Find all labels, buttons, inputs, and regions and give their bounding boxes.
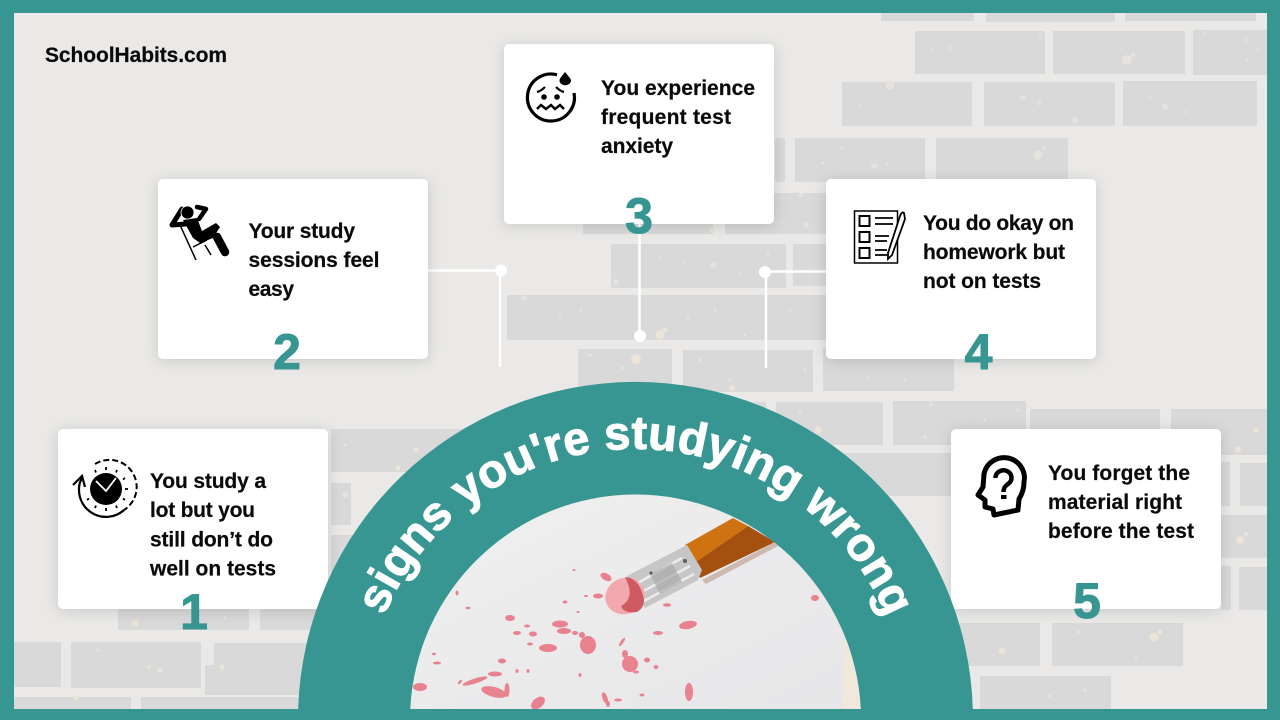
text: sign 2: sessions feel <box>248 249 380 272</box>
text: sign 1: You study a <box>150 470 266 493</box>
icon: checklist and pencil <box>854 211 905 263</box>
text: sign 3: You experience <box>601 77 755 100</box>
text: sign 3 <box>601 77 755 158</box>
panel: sign 5 <box>951 429 1221 629</box>
number 3: 3 <box>625 188 653 244</box>
text: sign 5: You forget the <box>1048 462 1190 485</box>
arch title: signs you're studying wrong <box>364 418 909 616</box>
photo: pencil erasing on paper <box>405 490 865 712</box>
number 2: 2 <box>273 324 301 380</box>
text: sign 1: lot but you <box>150 499 255 522</box>
text: sign 2 <box>248 220 380 301</box>
text: sign 1: still don’t do <box>150 528 273 552</box>
text: sign 1: well on tests <box>149 558 276 580</box>
panel: sign 1 <box>58 429 328 640</box>
text: sign 3: frequent test <box>601 106 731 129</box>
text: sign 4: homework but <box>923 241 1065 264</box>
connector: card 4 <box>759 266 826 368</box>
text: sign 5: before the test <box>1048 520 1194 543</box>
icon: head with question mark <box>978 458 1024 515</box>
panel: sign 2 <box>158 179 428 380</box>
text: sign 5: material right <box>1048 491 1182 514</box>
text: sign 3: anxiety <box>601 135 673 158</box>
eraser crumbs <box>413 569 819 712</box>
panel: sign 3 <box>504 44 774 244</box>
text: sign 5 <box>1048 462 1194 543</box>
connector: card 3 <box>634 224 646 342</box>
panel: sign 4 <box>826 179 1096 380</box>
number 5: 5 <box>1073 573 1101 629</box>
icon: anxious face with sweat drop <box>527 72 574 121</box>
text: sign 4: not on tests <box>923 270 1041 293</box>
connector: card 2 <box>428 264 507 367</box>
icon: clock with cycle arrow <box>73 460 137 517</box>
icon: relaxed person in chair <box>172 206 225 260</box>
number 1: 1 <box>180 584 208 640</box>
number 4: 4 <box>965 324 993 380</box>
text: sign 1 <box>149 470 276 580</box>
text: sign 4: You do okay on <box>923 212 1074 235</box>
text: sign 4 <box>923 212 1074 293</box>
text: sign 2: Your study <box>248 220 355 243</box>
teal arch <box>298 382 973 709</box>
text: sign 2: easy <box>248 278 294 301</box>
logo text: SchoolHabits.com <box>45 44 227 67</box>
